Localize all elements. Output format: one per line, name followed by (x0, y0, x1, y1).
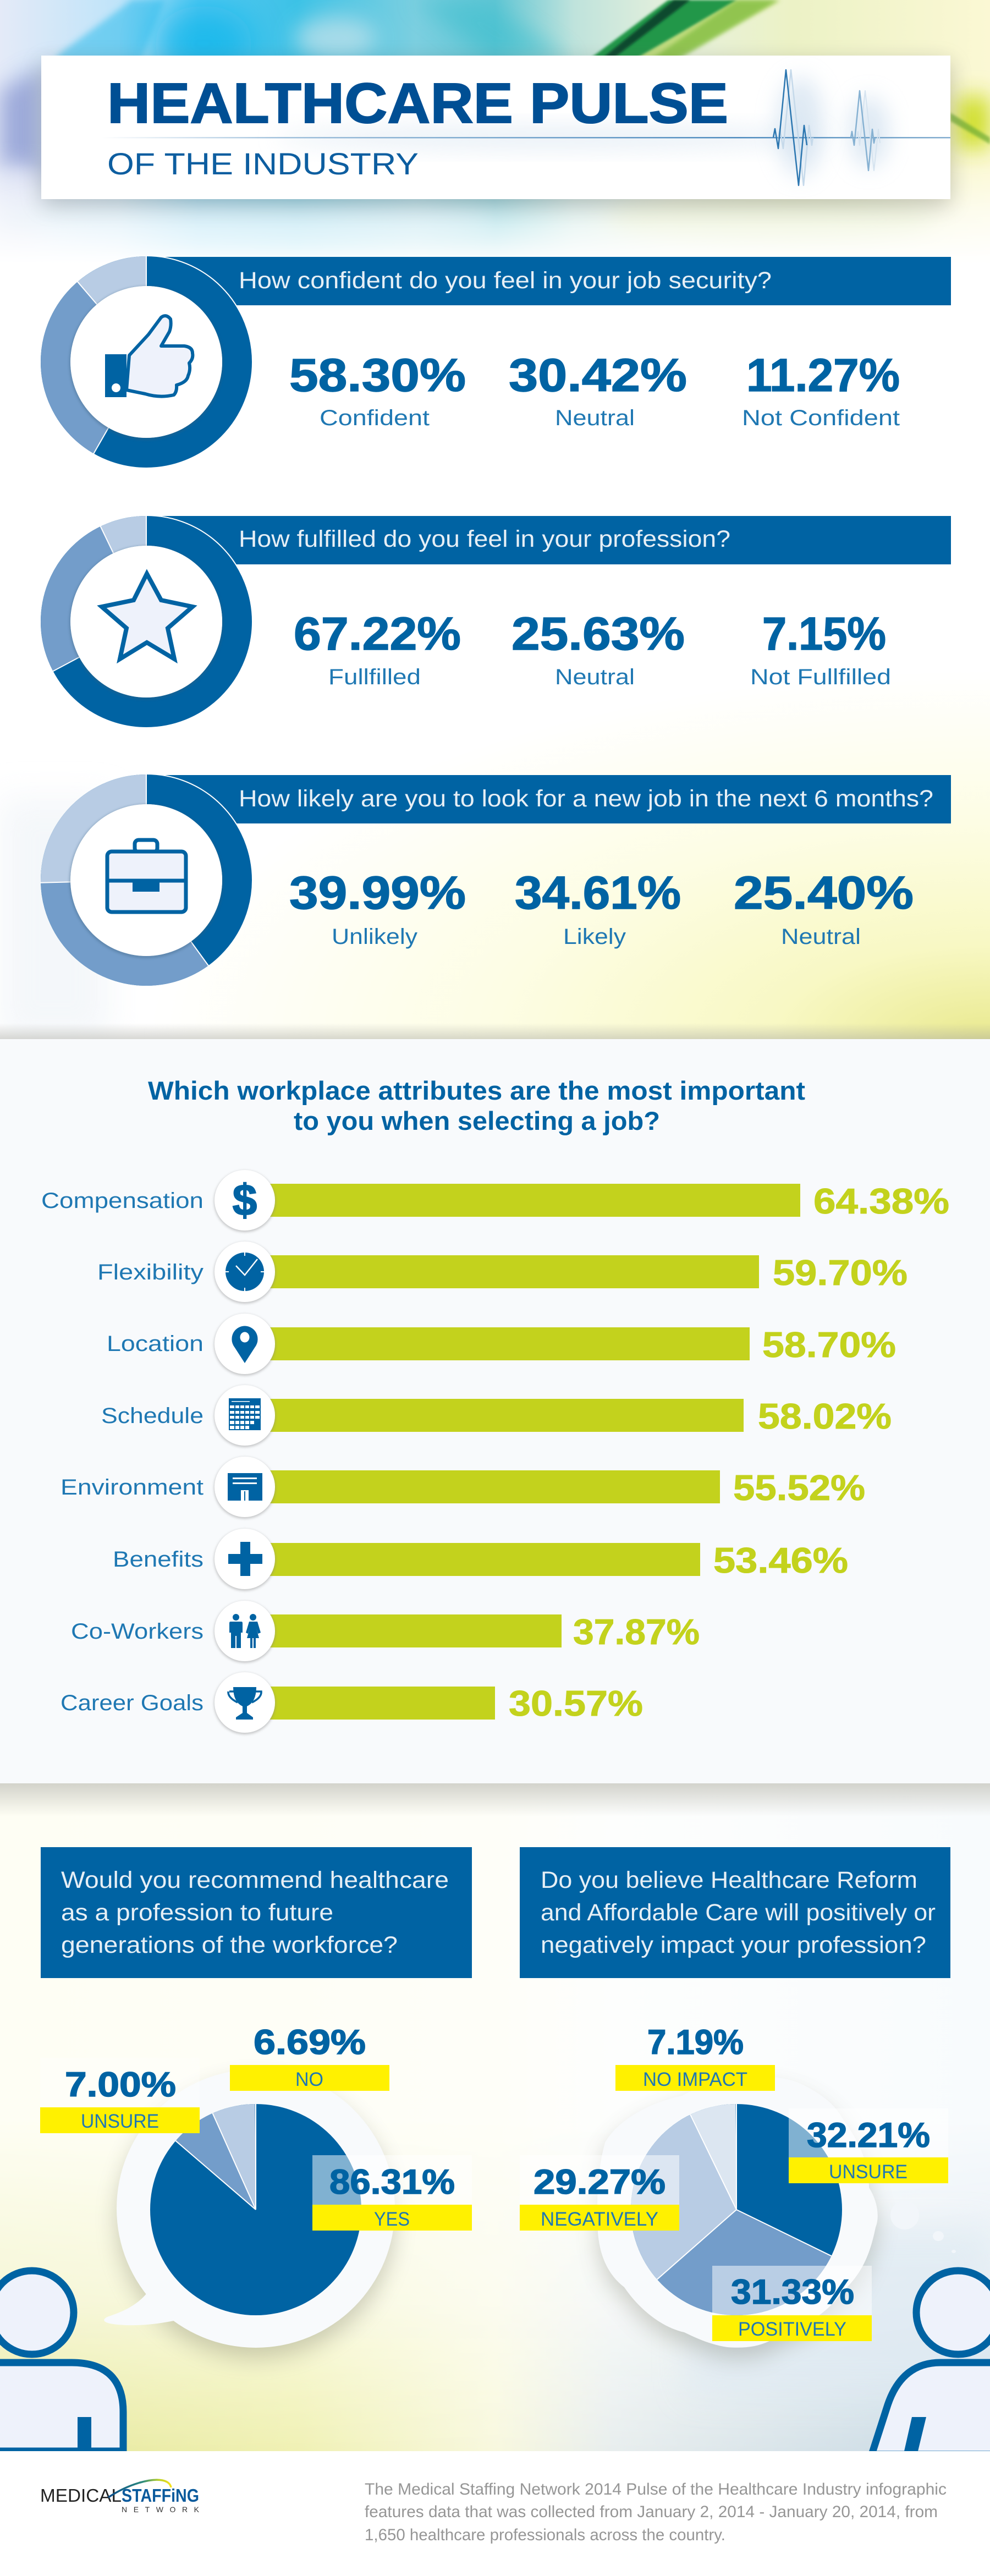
row: benefits: 53.46% (713, 1540, 848, 1580)
text block: source note (365, 2480, 947, 2544)
donut chart (56, 256, 237, 454)
heading: healthcare pulse: HEALTHCARE PULSE (107, 72, 728, 135)
stat: likely: 34.61% (515, 867, 681, 919)
row: environment: 55.52% (733, 1468, 865, 1508)
stat: neutral: 25.63% (512, 608, 685, 660)
question box: negatively impact your profession? (541, 1932, 926, 1958)
icon: person right (872, 2271, 990, 2454)
label: no impact: NO IMPACT (643, 2069, 747, 2090)
question box: as a profession to future (61, 1899, 333, 1926)
panel: job search (40, 773, 951, 987)
stat: not confident (742, 349, 900, 430)
question box (520, 1847, 950, 1978)
question box: generations of the workforce? (61, 1932, 398, 1958)
row: co-workers: 37.87% (573, 1612, 700, 1652)
row: location: Location (107, 1332, 204, 1356)
subheading: OF THE INDUSTRY (107, 146, 419, 181)
question banner: How confident do you feel in your job security? (239, 267, 772, 294)
question box (41, 1847, 472, 1978)
stat: likely (515, 867, 681, 949)
donut chart (53, 515, 237, 712)
stat: confident (289, 349, 466, 430)
label: no (230, 2023, 389, 2091)
speech bubble (104, 2069, 395, 2359)
row: flexibility (97, 1242, 908, 1304)
label: yes: 86.31% (329, 2163, 455, 2201)
stat: neutral: 25.40% (734, 867, 914, 919)
footer (0, 2451, 990, 2576)
question banner (162, 516, 951, 564)
stat: unlikely: Unlikely (332, 925, 417, 949)
label: negatively (520, 2155, 679, 2231)
stat: neutral: Neutral (781, 925, 861, 949)
label: unsure (789, 2108, 948, 2183)
question box: Do you believe Healthcare Reform (541, 1867, 917, 1893)
label: no impact (615, 2023, 775, 2091)
stat: neutral (509, 349, 687, 430)
question banner: How fulfilled do you feel in your profession? (239, 526, 730, 552)
label: positively: 31.33% (731, 2273, 854, 2311)
stat: unlikely (289, 867, 466, 949)
label: unsure: UNSURE (829, 2161, 908, 2183)
stat: not fulfilled: 7.15% (762, 608, 886, 660)
row: flexibility: Flexibility (97, 1260, 204, 1284)
icon: plus (228, 1542, 262, 1576)
heading: Which workplace attributes are the most important (148, 1076, 805, 1105)
row: co-workers (71, 1601, 700, 1663)
icon: dollar: $ (233, 1176, 257, 1224)
row: flexibility: 59.70% (773, 1253, 908, 1293)
panel: fulfilment (40, 515, 951, 728)
label: unsure: 7.00% (65, 2066, 176, 2104)
label: unsure (40, 2058, 200, 2133)
stat: confident: 58.30% (289, 349, 466, 401)
panel: healthcare reform (520, 1847, 990, 2454)
question banner (165, 775, 951, 823)
label: unsure: 32.21% (807, 2116, 930, 2155)
label: unsure: UNSURE (81, 2111, 159, 2132)
stat: neutral: Neutral (555, 406, 635, 430)
icon: star (102, 574, 193, 659)
text block: source note: The Medical Staffing Network 2014 Pulse of the Healthcare Industry infographic (365, 2480, 947, 2498)
stat: fulfilled: Fullfilled (328, 665, 421, 689)
stat: likely: Likely (563, 925, 626, 949)
question banner: How likely are you to look for a new job in the next 6 months? (239, 786, 933, 812)
question box: Would you recommend healthcare (61, 1867, 449, 1893)
row: compensation: Compensation (41, 1189, 204, 1213)
icon: map pin (232, 1326, 258, 1363)
label: no impact: 7.19% (647, 2023, 744, 2062)
pie chart (631, 2104, 842, 2315)
row: schedule: Schedule (101, 1404, 204, 1428)
logo: medical staffing network: STAFFiNG (122, 2485, 199, 2506)
logo: medical staffing network: MEDICAL (40, 2485, 122, 2506)
panel: recommend healthcare (0, 1847, 472, 2451)
row: environment (61, 1457, 865, 1519)
row: benefits (113, 1529, 848, 1591)
row: environment: Environment (61, 1475, 204, 1500)
icon: briefcase (107, 840, 186, 912)
row: co-workers: Co-Workers (71, 1619, 204, 1644)
icon: thumbs up (105, 316, 193, 397)
icon: calendar (229, 1398, 261, 1430)
stat: neutral: 30.42% (509, 349, 687, 401)
row: compensation: 64.38% (813, 1181, 949, 1221)
icon: heartbeat pulse line (102, 70, 950, 185)
label: negatively: NEGATIVELY (541, 2209, 658, 2230)
row: location (107, 1314, 896, 1376)
stat: not confident: 11.27% (746, 349, 900, 401)
thought bubble (597, 2077, 956, 2359)
label: no: 6.69% (254, 2023, 366, 2062)
stat: fulfilled: 67.22% (294, 608, 461, 660)
stat: not fulfilled: Not Fullfilled (750, 665, 891, 689)
heading (148, 1076, 805, 1135)
title card (41, 56, 950, 206)
stat: neutral (512, 608, 685, 689)
icon: building (228, 1473, 262, 1501)
row: schedule: 58.02% (758, 1396, 892, 1436)
stat: not fulfilled (750, 608, 891, 689)
label: yes: YES (374, 2209, 410, 2230)
heading: to you when selecting a job? (294, 1106, 660, 1135)
panel: workplace attributes (0, 1039, 990, 1783)
icon: person left (0, 2271, 123, 2451)
stat: unlikely: 39.99% (289, 867, 466, 919)
row: career goals: 30.57% (509, 1683, 643, 1723)
logo: medical staffing network (40, 2480, 200, 2514)
stat: not confident: Not Confident (742, 406, 900, 430)
panel: job security (40, 255, 951, 469)
text block: source note: 1,650 healthcare professionals across the country. (365, 2526, 725, 2544)
row: benefits: Benefits (113, 1547, 204, 1572)
label: yes (312, 2155, 472, 2231)
row: location: 58.70% (762, 1325, 896, 1365)
label: negatively: 29.27% (534, 2163, 666, 2201)
logo: medical staffing network: NETWORK (122, 2505, 200, 2514)
question banner (165, 257, 951, 305)
label: positively (712, 2266, 872, 2341)
stat: neutral: Neutral (555, 665, 635, 689)
stat: confident: Confident (320, 406, 430, 430)
icon: people (229, 1614, 261, 1648)
row: schedule (101, 1385, 892, 1447)
stat: neutral (734, 867, 914, 949)
question box: and Affordable Care will positively or (541, 1899, 936, 1926)
label: positively: POSITIVELY (738, 2319, 846, 2340)
text block: source note: features data that was collected from January 2, 2014 - January 20, 2014, from (365, 2503, 938, 2521)
row: career goals: Career Goals (61, 1691, 204, 1715)
stat: fulfilled (294, 608, 461, 689)
row: career goals (61, 1672, 643, 1734)
label: no: NO (295, 2069, 323, 2090)
donut chart (40, 774, 237, 971)
row: compensation (41, 1170, 949, 1232)
pie chart (150, 2104, 361, 2315)
icon: clock (226, 1253, 264, 1291)
icon: trophy (228, 1687, 261, 1720)
